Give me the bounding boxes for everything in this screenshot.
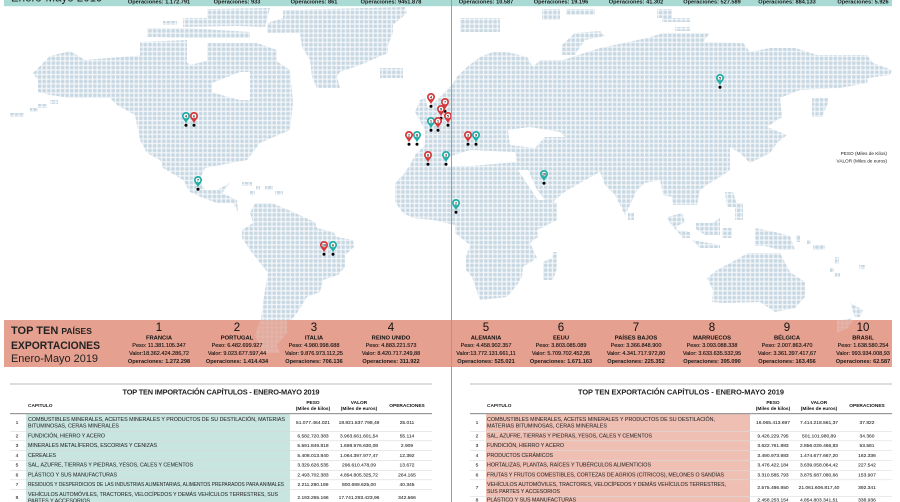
- country 8: Operaciones: 395.090: [683, 359, 741, 365]
- import table header: CAPITULO: [28, 403, 53, 409]
- import row 4: 5.408.013.840: [297, 453, 329, 459]
- import row 2: 55.114: [400, 434, 415, 440]
- export row 2: 34.360: [860, 434, 875, 440]
- country 2: Valor: 9.023.677.597,44: [208, 351, 266, 357]
- import row 4: 4: [16, 453, 19, 459]
- country 1: 1: [156, 322, 162, 334]
- import row 3: MINERALES METALÍFEROS, ESCORIAS Y CENIZAS: [28, 442, 157, 449]
- country 10: 10: [857, 322, 869, 334]
- export row 7: VEHÍCULOS AUTOMÓVILES, TRACTORES, VELOCÍPEDOS Y DEMÁS VEHÍCULOS TERRESTRES,: [487, 481, 726, 488]
- export row 6: 3.310.585.793: [757, 472, 789, 478]
- map legend: PESO (Miles de Kilos): [841, 151, 887, 156]
- import row 7: RESIDUOS Y DESPERDICIOS DE LAS INDUSTRIAS ALIMENTARIAS, ALIMENTOS PREPARADOS PARA ANIMALES: [28, 482, 284, 488]
- import row 3: 1.698.976.630,08: [340, 443, 378, 449]
- map: New Guinea: [755, 228, 795, 250]
- country 3: Peso: 4.980.998.688: [289, 343, 339, 349]
- map pins: 6: [332, 243, 334, 247]
- country 7: Valor: 4.341.717.972,80: [607, 351, 665, 357]
- import row 6: [16, 472, 416, 478]
- import row 1: 18.821.537.798,49: [339, 420, 380, 426]
- map: Greenland: [270, 7, 407, 88]
- country 6: Peso: 3.803.085.089: [536, 343, 586, 349]
- export chapters table: [470, 384, 892, 502]
- map pins: 6: [193, 114, 195, 118]
- import row 8: 342.566: [398, 495, 416, 501]
- import row 1: 1: [16, 420, 19, 426]
- export table header: CAPITULO: [487, 403, 512, 409]
- import row 6: 2.493.702.383: [297, 472, 329, 478]
- country 2: [206, 322, 269, 365]
- country 9: BÉLGICA: [774, 334, 801, 342]
- map: Caribbean: [242, 182, 283, 195]
- import row 5: 296.610.478,09: [342, 462, 376, 468]
- map: Sri Lanka: [628, 213, 634, 220]
- import row 3: 3: [16, 443, 19, 449]
- export row 3: 3.622.761.883: [757, 443, 789, 449]
- export table header: (Miles de kilos): [756, 406, 791, 412]
- export row 3: FUNDICIÓN, HIERRO Y ACERO: [487, 442, 564, 449]
- map pins: 7: [444, 100, 446, 104]
- export row 2: 2: [476, 434, 479, 440]
- export row 1: MATERIAS BITUMINOSAS, CERAS MINERALES: [487, 424, 607, 430]
- map: Indonesia and Philippines: [667, 192, 743, 248]
- import table title: TOP TEN IMPORTACIÓN CAPÍTULOS - ENERO-MAYO 2019: [122, 388, 320, 396]
- country 3: [285, 322, 343, 365]
- import row 5: 13.672: [400, 462, 415, 468]
- export row 7: 7: [476, 485, 479, 491]
- import table header: (Miles de euros): [341, 406, 378, 412]
- import row 7: 40.345: [400, 482, 415, 488]
- export row 6: 153.907: [858, 472, 876, 478]
- country 7: [607, 322, 665, 365]
- export row 4: 1.474.677.667,20: [800, 453, 838, 459]
- export row 7: 392.341: [858, 485, 876, 491]
- country 3: Valor: 9.876.973.112,25: [285, 351, 343, 357]
- map pins: 8: [427, 153, 429, 157]
- export row 1: COMBUSTIBLES MINERALES, ACEITES MINERALES Y PRODUCTOS DE SU DESTILACIÓN,: [487, 416, 715, 423]
- export row 8: [476, 496, 876, 502]
- map pins: 7: [197, 178, 199, 182]
- country 5: Peso: 4.458.902.357: [461, 343, 511, 349]
- export row 5: 3.476.422.184: [757, 462, 789, 468]
- export row 3: 53.581: [860, 443, 875, 449]
- map legend: VALOR (Miles de euros): [837, 158, 887, 164]
- country 7: Peso: 3.366.848.900: [611, 343, 661, 349]
- export row 3: 2.856.029.466,83: [800, 443, 838, 449]
- export row 7: [476, 481, 876, 495]
- export row 1: 7.414.218.561,37: [800, 420, 838, 426]
- export table header: VALOR: [811, 400, 828, 406]
- country 9: Valor: 3.361.397.417,67: [758, 351, 816, 357]
- import row 8: 17.741.293.423,96: [339, 495, 380, 501]
- top ten export countries band: [4, 320, 892, 367]
- country 7: Operaciones: 225.352: [607, 359, 665, 365]
- import row 2: FUNDICIÓN, HIERRO Y ACERO: [28, 432, 105, 440]
- country 5: Valor:13.772.131.661,11: [456, 351, 516, 357]
- import row 1: BITUMINOSAS, CERAS MINERALES: [28, 424, 119, 430]
- export row 7: 21.061.606.817,40: [799, 485, 840, 491]
- country 6: EEUU: [553, 336, 569, 342]
- country 5: [456, 322, 516, 365]
- map pins: 4: [430, 95, 432, 99]
- top teal band: [4, 0, 892, 6]
- export row 6: [476, 472, 876, 478]
- map pins: 8: [416, 133, 418, 137]
- import row 2: 3.963.661.601,54: [340, 434, 378, 440]
- import table header: OPERACIONES: [389, 403, 426, 409]
- import row 1: 51.077.464.021: [296, 420, 330, 426]
- import row 6: 264.165: [398, 472, 416, 478]
- band heading: EXPORTACIONES: [11, 340, 100, 352]
- band heading: TOP TEN PAÍSES: [11, 325, 92, 337]
- country 10: Valor: 993.934.008,93: [836, 351, 890, 357]
- map pins: 5: [447, 114, 449, 118]
- country 5: ALEMANIA: [471, 336, 502, 342]
- country 4: 4: [388, 322, 395, 334]
- map: Eurasia and Africa: [395, 33, 892, 300]
- map pins: [182, 74, 724, 256]
- map: South America: [242, 203, 354, 325]
- export row 4: [476, 452, 876, 459]
- central divider line: [450, 0, 452, 502]
- import row 4: CEREALES: [28, 453, 56, 459]
- country 3: Operaciones: 706.136: [285, 359, 343, 365]
- country 3: 3: [311, 322, 317, 334]
- import row 6: 4.894.805.325,72: [340, 472, 378, 478]
- export row 4: 3.490.973.983: [757, 453, 789, 459]
- map: Alaska peninsula dots: [10, 100, 58, 117]
- export table header: (Miles de euros): [801, 406, 838, 412]
- map: Svalbard and Arctic north: [460, 9, 690, 32]
- map: North America: [33, 51, 293, 212]
- export row 7: 2.575.486.950: [757, 485, 789, 491]
- export row 6: 6: [476, 472, 479, 478]
- country 2: 2: [234, 322, 240, 334]
- import row 5: [16, 462, 415, 468]
- import row 1: [16, 416, 415, 430]
- country 6: Operaciones: 1.671.163: [530, 359, 592, 365]
- import row 2: 6.582.720.383: [297, 434, 329, 440]
- export row 7: SUS PARTES Y ACCESORIOS: [487, 489, 560, 495]
- faint map dots under band: [255, 320, 287, 353]
- map pins: 1: [430, 119, 432, 123]
- export row 1: 37.822: [860, 420, 875, 426]
- country 1: Peso: 11.381.105.347: [132, 343, 186, 349]
- import row 7: 7: [16, 482, 19, 488]
- export table header: OPERACIONES: [849, 403, 886, 409]
- import row 7: 800.689.625,00: [342, 482, 376, 488]
- map pins: 10: [542, 172, 546, 176]
- export row 2: 9.426.229.795: [757, 434, 789, 440]
- import row 5: 3.329.626.535: [297, 462, 329, 468]
- country 1: FRANCIA: [146, 336, 173, 342]
- export row 2: 501.101.980,89: [802, 434, 836, 440]
- import row 2: [16, 432, 415, 440]
- country 8: MARRUECOS: [693, 336, 731, 342]
- import row 5: 5: [16, 462, 19, 468]
- country 2: Operaciones: 1.414.434: [206, 359, 269, 365]
- map: Australia: [707, 253, 805, 312]
- import row 4: [16, 453, 415, 459]
- export row 3: [476, 442, 875, 449]
- dotted world map: [10, 7, 892, 333]
- import row 1: COMBUSTIBLES MINERALES, ACEITES MINERALES Y PRODUCTOS DE SU DESTILACIÓN, MATERIAS: [28, 416, 285, 423]
- import row 2: 2: [16, 434, 19, 440]
- export row 4: 4: [476, 453, 479, 459]
- import row 3: 2.909: [401, 443, 413, 449]
- country 8: 8: [709, 322, 715, 334]
- export row 2: [476, 434, 875, 440]
- import table header: VALOR: [351, 400, 368, 406]
- export row 6: FRUTAS Y FRUTOS COMESTIBLES, CORTEZAS DE AGRIOS (CÍTRICOS), MELONES O SANDÍAS: [487, 472, 724, 478]
- map: Madagascar: [543, 252, 557, 280]
- map pins: 3: [467, 133, 469, 137]
- country 2: PORTUGAL: [221, 336, 254, 342]
- map pins: 9: [440, 107, 442, 111]
- map pins: 2: [455, 201, 457, 205]
- country 8: Valor: 3.633.635.532,95: [683, 351, 741, 357]
- country 10: BRASIL: [852, 336, 874, 342]
- import row 3: 5.591.849.818: [297, 443, 329, 449]
- country 9: [758, 322, 816, 365]
- export row 5: 3.639.058.064,42: [800, 462, 838, 468]
- map legend: [837, 151, 887, 164]
- country 4: Operaciones: 311.922: [362, 359, 420, 365]
- country 4: Valor: 8.420.717.249,88: [362, 351, 420, 357]
- country 7: PAÍSES BAJOS: [615, 334, 657, 342]
- import row 8: [16, 491, 416, 502]
- band heading: Enero-Mayo 2019: [11, 353, 98, 365]
- map: Japan: [812, 98, 828, 117]
- country 9: Operaciones: 163.456: [758, 359, 816, 365]
- map pins: 2: [408, 133, 410, 137]
- country 6: 6: [558, 322, 564, 334]
- map: Arctic islands: [140, 8, 297, 63]
- country 3: ITALIA: [305, 336, 324, 342]
- export table header: PESO: [766, 400, 780, 406]
- export row 6: 3.875.687.080,66: [800, 472, 838, 478]
- map pins: 1: [437, 119, 439, 123]
- country 6: [530, 322, 592, 365]
- import row 8: 2.193.265.166: [297, 495, 329, 501]
- import chapters table: [10, 384, 432, 502]
- country 10: Operaciones: 62.587: [836, 359, 890, 365]
- country 7: 7: [633, 322, 639, 334]
- import row 4: 12.392: [400, 453, 415, 459]
- country 5: Operaciones: 525.021: [457, 359, 515, 365]
- country 1: Operaciones: 1.272.298: [128, 359, 190, 365]
- export table title: TOP TEN EXPORTACIÓN CAPÍTULOS - ENERO-MAYO 2019: [578, 388, 784, 396]
- export row 2: SAL, AZUFRE, TIERRAS Y PIEDRAS, YESOS, CALES Y CEMENTOS: [487, 434, 652, 440]
- country 4: REINO UNIDO: [372, 336, 411, 342]
- map pins: 9: [475, 133, 477, 137]
- export row 5: [476, 462, 876, 468]
- import row 3: [16, 442, 413, 449]
- country 5: 5: [483, 322, 489, 334]
- export table header: [487, 400, 886, 412]
- map: New Zealand and Pacific islands: [796, 235, 865, 333]
- export row 5: 227.542: [858, 462, 876, 468]
- country 1: [128, 322, 190, 365]
- map pins: 5: [719, 76, 721, 80]
- export row 5: HORTALIZAS, PLANTAS, RAÍCES Y TUBÉRCULOS ALIMENTICIOS: [487, 462, 651, 468]
- country 6: Valor: 5.709.702.452,95: [532, 351, 590, 357]
- country 4: [362, 322, 420, 365]
- country 10: Peso: 1.638.580.254: [838, 343, 888, 349]
- country 9: Peso: 2.007.863.470: [762, 343, 812, 349]
- import row 5: SAL, AZUFRE, TIERRAS Y PIEDRAS, YESOS, CALES Y CEMENTOS: [28, 462, 193, 468]
- map: Novaya Zemlya: [562, 31, 605, 55]
- country 10: [836, 322, 890, 365]
- country 2: Peso: 6.482.699.927: [212, 343, 262, 349]
- import row 6: 6: [16, 472, 19, 478]
- import row 8: VEHÍCULOS AUTOMÓVILES, TRACTORES, VELOCÍPEDOS Y DEMÁS VEHÍCULOS TERRESTRES, SUS: [28, 491, 278, 498]
- country 1: Valor:18.362.424.286,72: [129, 351, 189, 357]
- country 9: 9: [784, 322, 790, 334]
- map pins: 3: [445, 153, 447, 157]
- map pins: 10: [322, 243, 326, 247]
- export row 3: 3: [476, 443, 479, 449]
- country 4: Peso: 4.883.221.573: [366, 343, 416, 349]
- map: Iceland: [380, 68, 403, 78]
- map pins: 4: [185, 114, 187, 118]
- import row 6: PLÁSTICO Y SUS MANUFACTURAS: [28, 472, 117, 478]
- export row 4: 162.336: [858, 453, 876, 459]
- export row 1: [476, 416, 875, 430]
- import row 4: 1.064.397.977,47: [340, 453, 378, 459]
- export row 4: PRODUCTOS CERÁMICOS: [487, 452, 553, 459]
- export row 1: 16.065.413.697: [756, 420, 790, 426]
- import row 1: 25.011: [400, 420, 415, 426]
- band heading: [11, 325, 100, 365]
- import row 7: 2.211.280.189: [298, 482, 329, 488]
- country 8: [683, 322, 741, 365]
- import table header: [28, 400, 426, 412]
- export row 5: 5: [476, 462, 479, 468]
- export row 1: 1: [476, 420, 479, 426]
- country 8: Peso: 3.093.088.338: [687, 343, 737, 349]
- import table header: (Miles de kilos): [296, 406, 331, 412]
- import table header: PESO: [306, 400, 320, 406]
- map seas: Hudson Bay and inland seas: [212, 72, 565, 200]
- import row 8: 8: [16, 495, 19, 501]
